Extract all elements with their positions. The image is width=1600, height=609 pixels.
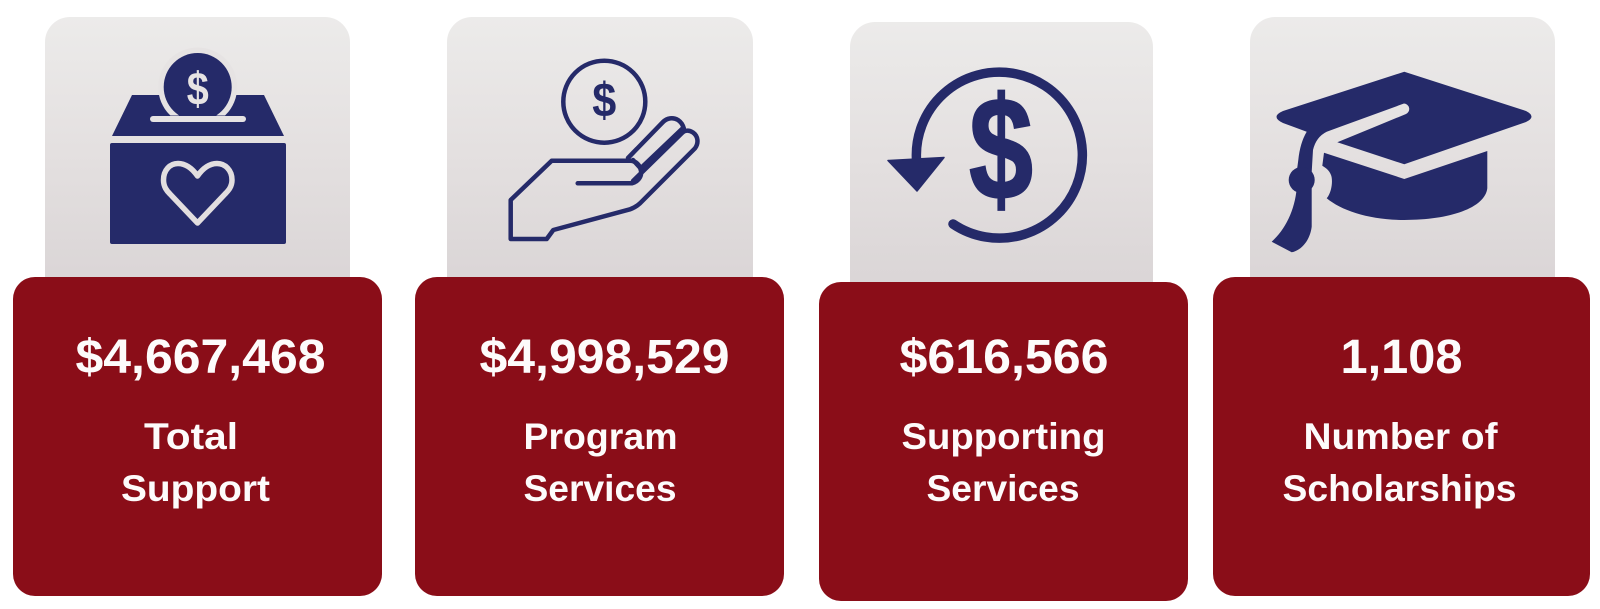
label: supporting services: Supporting [902, 416, 1106, 457]
card: total support [13, 277, 382, 596]
label: number of scholarships [1282, 416, 1516, 509]
label: program services: Services [524, 468, 676, 509]
label: program services [524, 416, 678, 509]
icon: hand holding coin: $ [592, 74, 617, 128]
label: total support [121, 416, 270, 509]
card: supporting services [819, 282, 1188, 601]
card: program services [415, 277, 784, 596]
value: program services: $4,998,529 [480, 331, 730, 384]
label: program services: Program [524, 416, 678, 457]
card: number of scholarships [1213, 277, 1590, 596]
label: total support: Support [121, 468, 270, 509]
icon: donation box with coin and heart: $ [187, 62, 209, 114]
value: supporting services: $616,566 [900, 331, 1108, 384]
icon: circular arrow with dollar [888, 67, 1082, 238]
value: total support: $4,667,468 [76, 331, 326, 384]
icon: hand holding coin [511, 61, 697, 239]
label: number of scholarships: Scholarships [1282, 468, 1516, 509]
icon tile: supporting services [850, 22, 1153, 290]
panel: program services [415, 17, 784, 596]
icon: graduation cap [1272, 72, 1532, 252]
panel: number of scholarships [1213, 17, 1590, 596]
icon tile: program services [447, 17, 753, 285]
icon tile: total support [45, 17, 350, 285]
label: supporting services: Services [926, 468, 1080, 509]
label: total support: Total [144, 416, 238, 457]
panel: supporting services [819, 22, 1188, 601]
icon: donation box with coin and heart [110, 48, 286, 244]
icon: circular arrow with dollar: $ [969, 67, 1033, 230]
value: number of scholarships: 1,108 [1340, 331, 1462, 384]
label: supporting services [902, 416, 1106, 509]
panel: total support [13, 17, 382, 596]
label: number of scholarships: Number of [1304, 416, 1498, 457]
icon tile: number of scholarships [1250, 17, 1555, 285]
